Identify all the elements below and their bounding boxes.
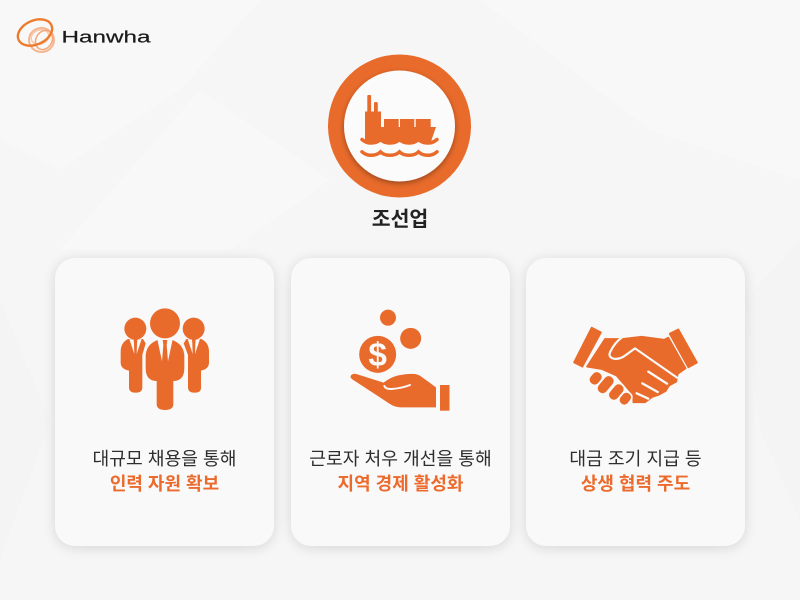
- logo: Hanwha: [16, 18, 151, 53]
- icon: business people: [120, 308, 209, 410]
- icon: hand with coins: [350, 310, 450, 411]
- text: partnership: 상생 협력 주도: [581, 474, 690, 494]
- text: wages: 지역 경제 활성화: [338, 474, 463, 494]
- clasped hands: [587, 337, 686, 402]
- panel: partnership: [526, 258, 745, 546]
- text: partnership: 대금 조기 지급 등: [569, 448, 702, 468]
- fingers: [587, 369, 605, 388]
- ship: [362, 95, 437, 143]
- hand outlines: [610, 338, 677, 399]
- panel: wages: [291, 258, 510, 546]
- text: hiring: 인력 자원 확보: [110, 474, 219, 494]
- icon: Hanwha rings: [14, 14, 56, 53]
- hand: [350, 374, 436, 407]
- orange ring: [328, 54, 471, 198]
- right person: [184, 339, 209, 393]
- left person: [121, 339, 146, 393]
- icon: handshake: [573, 326, 698, 405]
- icon: shipbuilding badge: [328, 54, 471, 198]
- centre person: [145, 339, 185, 411]
- waves: [362, 152, 437, 155]
- hand crease: [384, 385, 410, 389]
- white inner disc: [344, 70, 455, 182]
- cuffs: [574, 328, 601, 367]
- dollar sign: $: [368, 337, 387, 374]
- text: wages: 근로자 처우 개선을 통해: [309, 448, 492, 468]
- text: hiring: [93, 448, 236, 494]
- text: wages: [309, 448, 492, 494]
- text: partnership: [569, 448, 702, 494]
- wordmark: Hanwha: [62, 28, 151, 46]
- text: hiring: 대규모 채용을 통해: [93, 448, 236, 468]
- panel: hiring: [55, 258, 274, 546]
- heading: 조선업: [372, 208, 428, 230]
